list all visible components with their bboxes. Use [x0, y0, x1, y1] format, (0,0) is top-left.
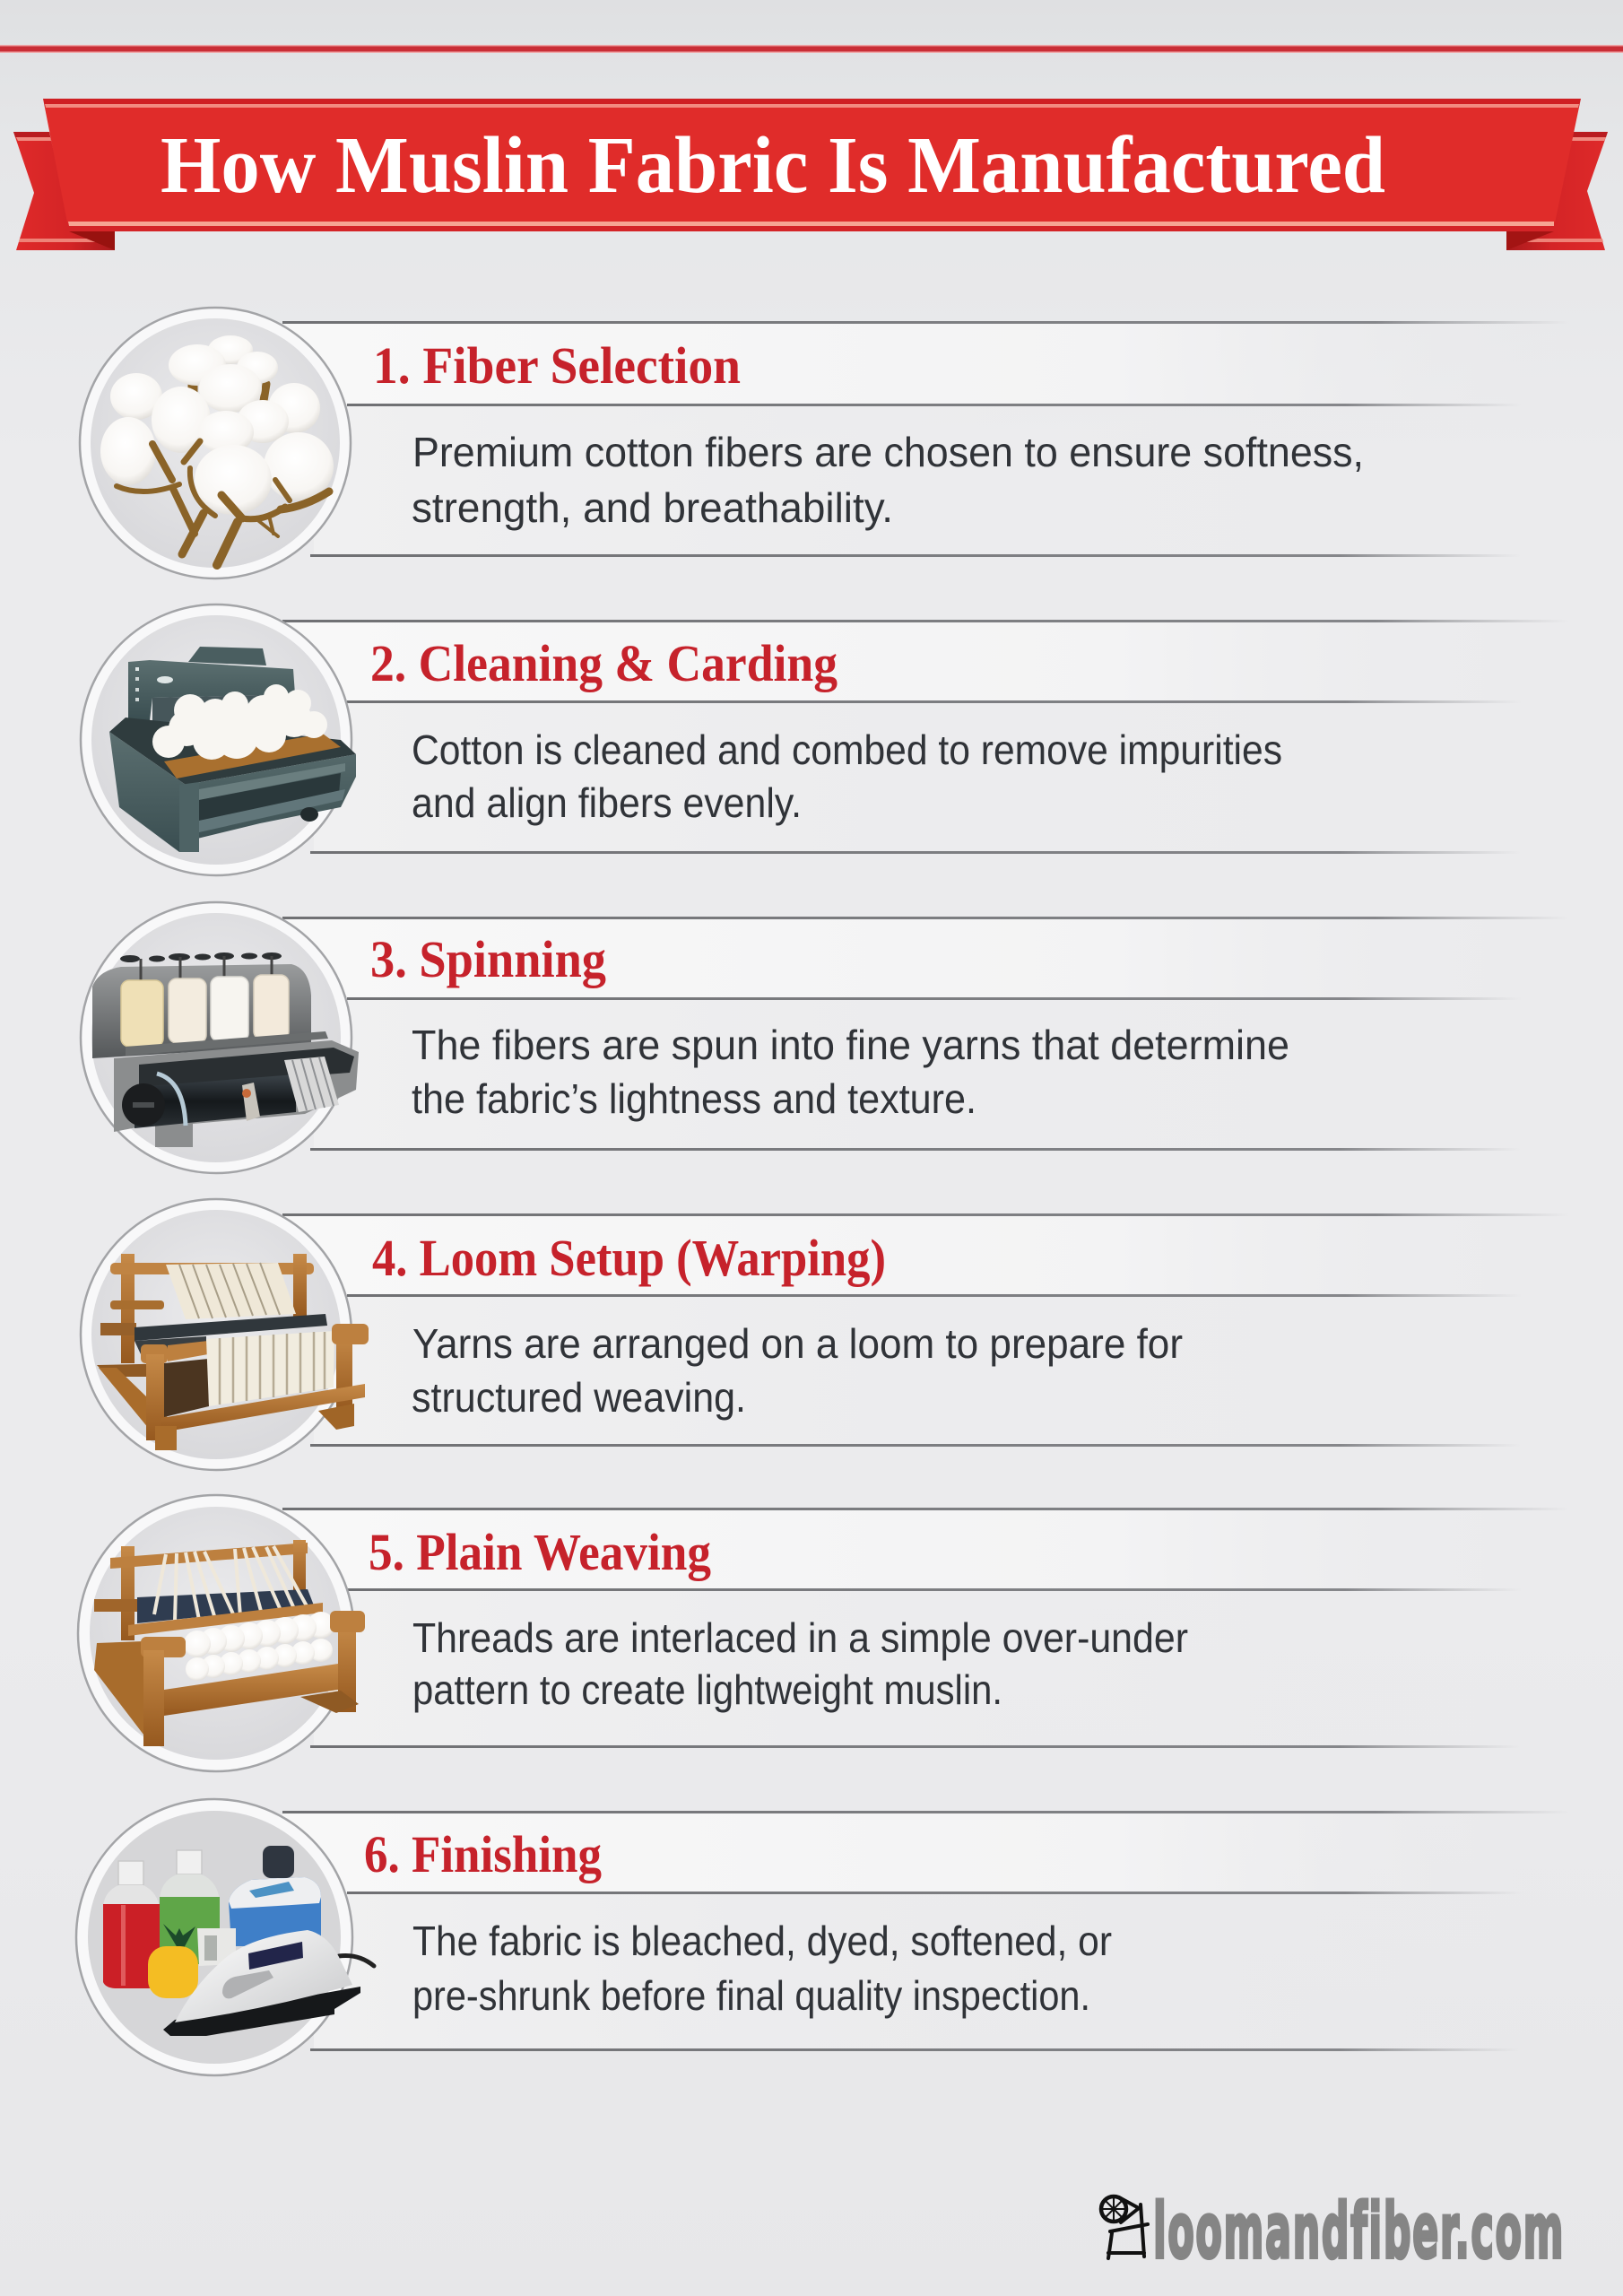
step 6 description: pre-shrunk before final quality inspection. [412, 1972, 1090, 2019]
step 5 medallion [78, 1495, 365, 1771]
icon: spinning wheel [1101, 2196, 1148, 2258]
step 3 description [412, 1022, 1289, 1122]
step 5: plain weaving [78, 1495, 1569, 1771]
step 5 description: pattern to create lightweight muslin. [412, 1666, 1002, 1713]
step 1 medallion [80, 308, 351, 578]
step 1 heading: 1. Fiber Selection [373, 336, 741, 395]
step 4: loom setup [81, 1199, 1569, 1470]
step 5 description: Threads are interlaced in a simple over-under [412, 1614, 1188, 1661]
step 1 rows and rules [282, 321, 1569, 557]
title ribbon banner [13, 99, 1608, 250]
ribbon main body [43, 99, 1581, 231]
step 3 heading: 3. Spinning [370, 930, 606, 988]
icon: chemical bottles and iron [103, 1846, 374, 2036]
step 6 description [412, 1918, 1112, 2019]
step 1 description [412, 429, 1364, 531]
website logo [1101, 2187, 1565, 2276]
step 3: spinning [81, 902, 1569, 1173]
step 4 medallion [81, 1199, 369, 1470]
step 6: finishing [76, 1799, 1569, 2075]
step 6 medallion [76, 1799, 374, 2075]
step 1: fiber selection [80, 308, 1569, 578]
step 2 description: and align fibers evenly. [412, 779, 802, 826]
step 5 description [412, 1614, 1188, 1713]
step 5 heading: 5. Plain Weaving [369, 1523, 711, 1581]
icon: weaving loom [94, 1540, 365, 1746]
step 6 heading: 6. Finishing [364, 1825, 602, 1883]
step 6 rows and rules [282, 1811, 1569, 2051]
top red rule [0, 45, 1623, 53]
ribbon left tail [13, 132, 115, 250]
title: How Muslin Fabric Is Manufactured [161, 121, 1385, 210]
step 3 description: the fabric’s lightness and texture. [412, 1075, 976, 1122]
ribbon right tail [1506, 132, 1608, 250]
icon: cotton bolls [100, 335, 334, 565]
step 4 heading: 4. Loom Setup (Warping) [372, 1229, 886, 1287]
step 2 description [412, 726, 1282, 826]
step 2 heading: 2. Cleaning & Carding [370, 634, 838, 692]
icon: spinning frame [92, 952, 359, 1147]
step 2 medallion [81, 604, 356, 875]
step 4 description: structured weaving. [412, 1374, 746, 1421]
step 3 medallion [81, 902, 359, 1173]
step 1 description: strength, and breathability. [412, 484, 893, 531]
icon: carding machine [109, 647, 356, 852]
step 1 description: Premium cotton fibers are chosen to ensure softness, [412, 429, 1364, 475]
step 3 rows and rules [282, 917, 1569, 1151]
step 6 description: The fabric is bleached, dyed, softened, or [412, 1918, 1112, 1964]
step 2 description: Cotton is cleaned and combed to remove impurities [412, 726, 1282, 773]
step 2: cleaning and carding [81, 604, 1569, 875]
step 2 rows and rules [282, 620, 1569, 854]
step 5 rows and rules [282, 1508, 1569, 1748]
step 3 description: The fibers are spun into fine yarns that determine [412, 1022, 1289, 1068]
step 4 description: Yarns are arranged on a loom to prepare for [412, 1320, 1183, 1367]
step 4 description [412, 1320, 1183, 1421]
icon: warping loom [97, 1254, 369, 1450]
step 4 rows and rules [282, 1213, 1569, 1447]
